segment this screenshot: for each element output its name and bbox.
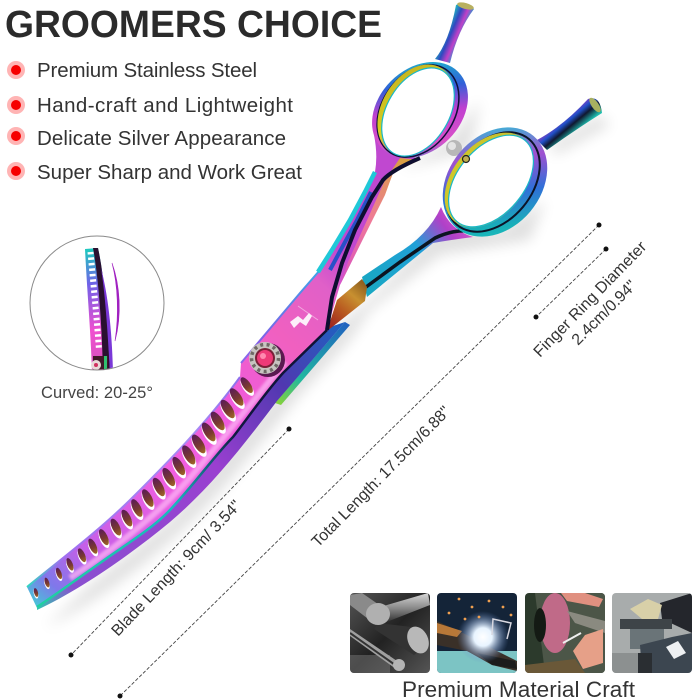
photo: grinding wheel — [525, 593, 605, 673]
pivot screw with gem — [249, 342, 285, 377]
lower purple blade edge — [37, 322, 345, 610]
photo: steel rods — [350, 593, 433, 673]
bullet: Delicate Silver Appearance: Delicate Silver Appearance — [37, 127, 286, 150]
finger ring one — [353, 1, 487, 177]
handle one blue stripe — [330, 192, 371, 270]
green under-blade strip — [275, 322, 350, 405]
mini curved scissors — [85, 248, 113, 372]
bullet: Premium Stainless Steel: Premium Stainless Steel — [37, 59, 257, 82]
thinning teeth holes — [32, 375, 257, 599]
handle one dark stripe — [327, 158, 420, 330]
feature list — [7, 59, 302, 184]
title: GROOMERS CHOICE — [5, 4, 382, 46]
dimension: total length: Total Length: 17.5cm/6.88" — [309, 403, 454, 551]
photo: hand finishing — [612, 593, 692, 673]
curved detail callout — [30, 236, 164, 402]
purple curve indicator — [112, 263, 119, 341]
dimension: finger ring diameter: 2.4cm/0.94" — [569, 277, 640, 349]
bullet: Super Sharp and Work Great: Super Sharp and Work Great — [37, 161, 302, 184]
handle two dark stripe — [366, 231, 472, 287]
finger ring two — [421, 96, 603, 258]
dimension: blade length: Blade Length: 9cm/ 3.54" — [109, 497, 245, 640]
caption: Curved: 20-25° — [41, 384, 153, 402]
handle two arm — [362, 207, 473, 297]
dimension: blade length — [68, 426, 292, 658]
light pink sheen near cutting edge — [70, 362, 285, 578]
brand logo mark — [290, 306, 318, 328]
ring stop screw — [446, 140, 462, 156]
bullet: Hand-craft and Lightweight: Hand-craft and Lightweight — [37, 94, 293, 117]
handle one peach stripe — [340, 158, 420, 285]
blade upper edge highlight — [27, 270, 320, 587]
blade cutting edge line — [37, 330, 327, 607]
photo: welding sparks — [437, 593, 517, 673]
handle one cyan stripe — [318, 172, 375, 272]
main blade and handle one body — [27, 135, 420, 608]
scissors — [27, 1, 610, 628]
scissors shadow — [45, 100, 610, 628]
dimension: finger ring diameter: Finger Ring Diameter — [531, 238, 651, 361]
gold inner heel — [327, 279, 367, 331]
dimension: total length — [118, 222, 602, 698]
